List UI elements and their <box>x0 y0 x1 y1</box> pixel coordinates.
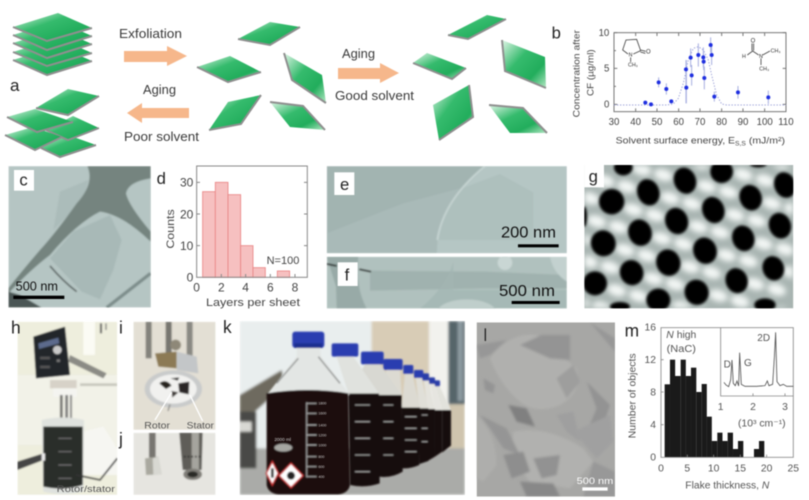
y ticks: 10 <box>180 239 194 253</box>
panel k: bottles of graphene dispersion photo <box>223 317 465 495</box>
lattice background and highlights <box>584 165 793 308</box>
inset Raman spectrum <box>724 332 793 387</box>
bars <box>203 182 290 277</box>
y ticks <box>644 322 656 464</box>
arrow: exfoliation <box>124 46 187 66</box>
panel letter a: a <box>10 76 20 95</box>
plot frame <box>197 166 307 277</box>
scale bar <box>518 244 559 247</box>
y axis title: Number of objects <box>628 353 639 438</box>
molecule: NMP <box>623 39 651 69</box>
micrograph flakes <box>477 322 615 497</box>
panel m: flake thickness histogram <box>625 321 799 492</box>
panel letter j: j <box>118 429 123 449</box>
x tick labels <box>609 117 794 128</box>
bottle graduation and volume text: 1000 <box>318 443 326 447</box>
molecule: DMF <box>742 38 781 72</box>
x tick labels: 30 <box>609 117 619 128</box>
bottle graduation and volume text: 1800 <box>318 402 326 406</box>
x ticks: 0 <box>658 464 664 475</box>
micrograph background <box>326 256 568 310</box>
panel letter f: f <box>345 266 350 285</box>
front bottle <box>266 332 350 494</box>
label: Exfoliation: Exfoliation <box>119 26 182 41</box>
x ticks: 5 <box>684 464 690 475</box>
x axis title: Solvent surface energy, E <box>616 135 722 145</box>
photo content <box>17 322 117 495</box>
x tick labels: 70 <box>695 117 705 128</box>
y axis title: Concentration after <box>571 30 581 117</box>
label: Aging right: Aging <box>342 46 375 61</box>
panel letter c: c <box>19 170 28 189</box>
inset x ticks: 1 <box>718 402 724 413</box>
micrograph background <box>327 166 567 253</box>
data points <box>643 43 770 106</box>
label: Poor solvent: Poor solvent <box>124 129 199 144</box>
panel letter i: i <box>119 317 123 337</box>
y axis title line 2: CF (µg/ml) <box>585 49 595 96</box>
scale bar <box>582 487 608 491</box>
x ticks: 4 <box>242 280 249 294</box>
x axis title: (mJ/m²) <box>746 135 785 145</box>
bottle graduation and volume text: 1600 <box>318 412 326 416</box>
error bars <box>659 37 768 104</box>
x tick labels: 50 <box>652 117 662 128</box>
arrow: good solvent aging <box>338 63 399 83</box>
panel a: exfoliation and aging schematic <box>5 13 547 157</box>
scale label: 500 nm <box>16 279 58 293</box>
bars <box>665 360 764 457</box>
N label: N=100 <box>267 255 299 267</box>
inset peak 2D: 2D <box>757 333 770 344</box>
y ticks: 0 <box>650 453 656 464</box>
inset peak D: D <box>724 360 731 371</box>
label Rotor: Rotor <box>144 420 170 430</box>
x ticks: 2 <box>218 280 225 294</box>
scale bar <box>512 301 560 304</box>
molecule: NMP: CH₃ <box>628 63 638 69</box>
bottle graduation and volume text: 1400 <box>318 423 326 427</box>
x ticks: 8 <box>292 280 299 294</box>
panel i: rotor and stator head photo <box>119 317 216 430</box>
annotation N high: N high <box>666 330 696 341</box>
rotor and stator pointers <box>155 392 203 421</box>
fit curve <box>614 47 786 105</box>
photo background <box>240 321 465 495</box>
panel letter k: k <box>223 317 232 337</box>
bottle graduation and volume text: 1200 <box>318 433 326 437</box>
inset x ticks <box>718 402 788 413</box>
x ticks: 25 <box>788 464 799 475</box>
y tick labels: 0 <box>604 100 609 111</box>
molecule: DMF: O <box>751 38 756 44</box>
x axis title: Flake thickness, N <box>685 481 770 492</box>
label: Good solvent: Good solvent <box>335 88 414 103</box>
panel f: TEM micrograph <box>326 256 568 310</box>
x ticks: 6 <box>267 280 274 294</box>
molecule: DMF: N <box>759 54 763 60</box>
plot frame and inset frame <box>661 328 793 457</box>
y ticks: 20 <box>180 207 194 221</box>
x ticks: 15 <box>735 464 746 475</box>
y tick labels <box>599 28 609 111</box>
inset x title: (10³ cm⁻¹) <box>738 419 786 430</box>
x ticks: 20 <box>761 464 773 475</box>
scale label: 200 nm <box>501 224 556 241</box>
label box c <box>14 170 34 191</box>
y axis title: Counts <box>165 209 177 249</box>
icon: aggregated sheets <box>5 89 99 157</box>
x tick labels: 100 <box>757 117 773 128</box>
x tick labels: 60 <box>673 117 684 128</box>
bottle graduation and volume text: 400 <box>318 475 324 479</box>
panel d: layer histogram <box>157 166 307 309</box>
bottle graduation and volume text <box>274 402 326 479</box>
bottle graduation and volume text: 2000 ml <box>274 437 291 442</box>
scale label: 500 nm <box>577 476 613 486</box>
inset x ticks: 2 <box>750 402 756 413</box>
label Rotor/stator: Rotor/stator <box>57 484 115 494</box>
y ticks: 8 <box>650 387 656 398</box>
x axis title: S,S <box>735 141 746 147</box>
photo content <box>133 433 216 495</box>
photo content <box>133 322 216 430</box>
panel letter h: h <box>11 317 21 337</box>
panel e: TEM micrograph <box>327 166 567 253</box>
molecule: NMP: O <box>646 50 651 56</box>
label Stator: Stator <box>187 420 214 430</box>
panel b: concentration vs surface energy chart <box>552 23 794 147</box>
y ticks: 30 <box>180 176 194 190</box>
y tick labels: 10 <box>599 28 609 39</box>
inset peak G: G <box>744 358 752 369</box>
panel letter g: g <box>589 167 598 186</box>
bottle graduation and volume text: 600 <box>318 465 324 469</box>
bottle graduation and volume text: 800 <box>318 455 324 459</box>
x tick labels: 90 <box>738 117 748 128</box>
micrograph background <box>8 166 151 308</box>
icon: stacked graphene sheets <box>13 13 92 75</box>
panel g: atomic lattice image <box>582 159 799 312</box>
x ticks: 10 <box>708 464 720 475</box>
x axis title: Layers per sheet <box>206 297 300 309</box>
panel letter l <box>485 328 486 341</box>
annotation NaC: (NaC) <box>667 344 696 355</box>
panel letter m: m <box>625 321 639 341</box>
y ticks: 16 <box>644 322 656 333</box>
molecule: DMF: H <box>742 54 746 60</box>
y tick labels: 5 <box>604 64 609 75</box>
label: Aging left: Aging <box>143 82 176 97</box>
y ticks: 4 <box>650 420 656 431</box>
icon: dispersed sheets, right <box>413 15 547 140</box>
panel letter d: d <box>157 169 166 188</box>
x tick labels: 40 <box>630 117 641 128</box>
x ticks: 0 <box>193 280 200 294</box>
scale label: 500 nm <box>499 283 555 300</box>
x tick labels: 80 <box>716 117 727 128</box>
panel j: rotor and stator parts photo <box>118 429 216 495</box>
panel letter b: b <box>552 23 561 42</box>
x ticks <box>193 280 299 294</box>
x tick labels: 110 <box>778 117 794 128</box>
panel h: rotor/stator mixer photo <box>11 317 117 495</box>
y ticks: 12 <box>644 355 656 366</box>
inset x ticks: 3 <box>782 402 788 413</box>
molecule: DMF: CH₃ <box>759 66 769 72</box>
panel l: TEM micrograph of flakes <box>477 322 615 497</box>
y ticks: 0 <box>187 271 194 285</box>
panel c: TEM micrograph <box>8 166 151 308</box>
molecule: NMP: N <box>629 53 633 59</box>
x ticks <box>658 464 799 475</box>
label box f <box>338 262 358 286</box>
molecule: DMF: CH₃ <box>771 48 781 54</box>
y ticks <box>180 176 194 285</box>
icon: dispersed sheets, centre <box>197 22 326 130</box>
label box e <box>334 172 354 195</box>
plot frame and ticks <box>614 33 786 112</box>
scale bar <box>13 296 64 299</box>
arrow: poor solvent aging <box>127 103 189 123</box>
panel letter e: e <box>340 175 349 194</box>
label box g <box>584 165 604 187</box>
lattice dark dots <box>582 159 799 312</box>
far bottles <box>332 343 451 486</box>
